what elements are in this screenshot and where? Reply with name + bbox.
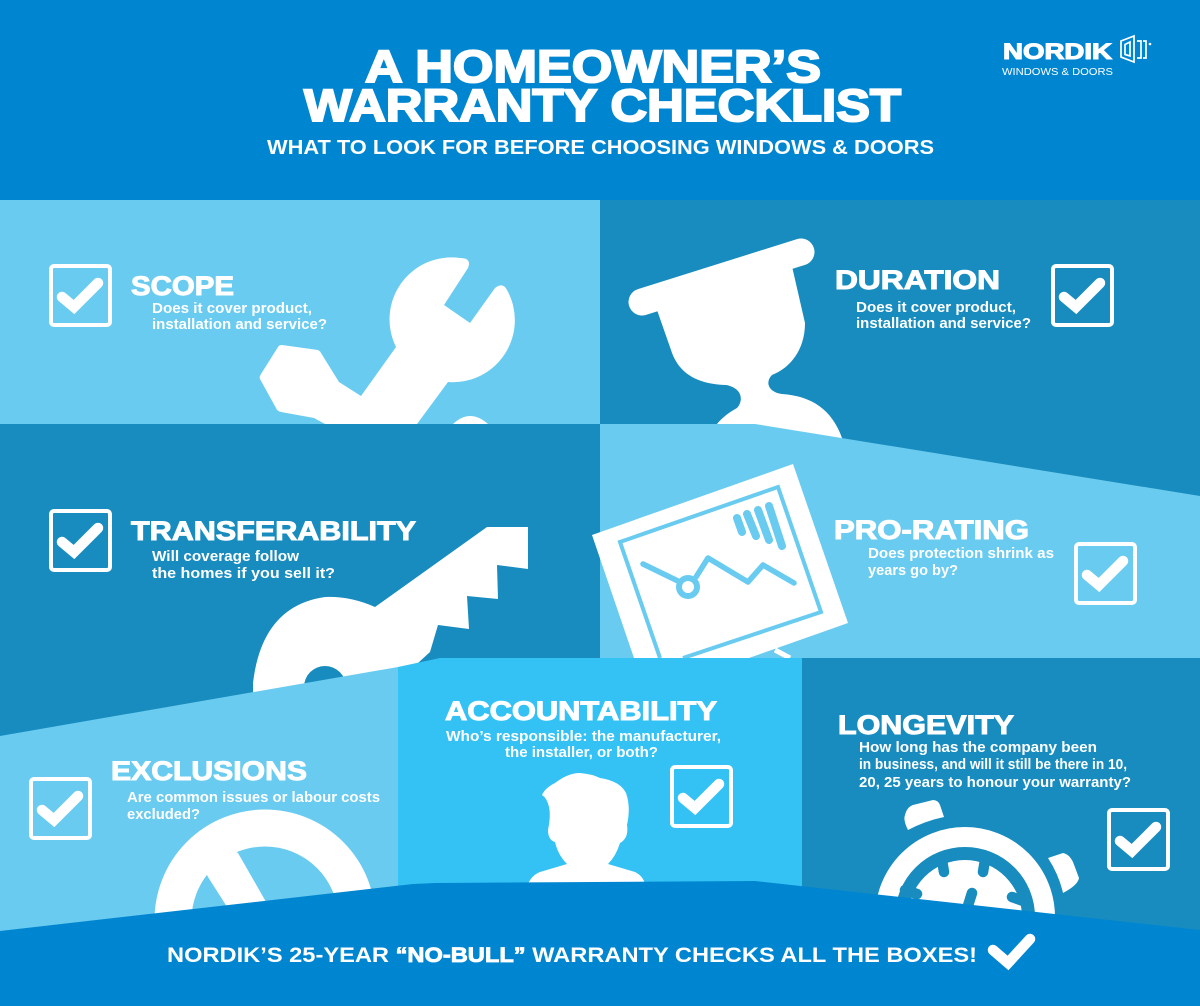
title: WARRANTY CHECKLIST — [304, 80, 901, 131]
checkbox: pro-rating — [1076, 544, 1135, 603]
title: A HOMEOWNER’S — [365, 41, 821, 92]
text: longevity question: How long has the company been — [859, 739, 1097, 756]
text: accountability question — [446, 728, 721, 761]
text: scope question — [152, 300, 327, 333]
text: transferability question: the homes if you sell it? — [152, 565, 335, 582]
checkbox: duration — [1053, 266, 1112, 325]
icon: prohibition sign — [173, 828, 357, 1006]
checkbox: accountability — [672, 767, 731, 826]
heading: scope: SCOPE — [131, 271, 234, 301]
panel: exclusions — [0, 667, 398, 1006]
panel: duration — [600, 200, 1200, 500]
subtitle: WHAT TO LOOK FOR BEFORE CHOOSING WINDOWS & DOORS — [267, 137, 934, 159]
text: longevity question: 20, 25 years to honour your warranty? — [859, 774, 1131, 791]
text: accountability question: the installer, or both? — [505, 744, 658, 761]
footer text: NORDIK’S 25-YEAR “NO-BULL” WARRANTY CHECKS ALL THE BOXES! — [167, 944, 977, 967]
text: pro-rating question: years go by? — [868, 562, 958, 579]
text: exclusions question — [127, 789, 380, 823]
heading: pro-rating: PRO-RATING — [834, 515, 1029, 545]
title — [304, 41, 901, 131]
checkbox: transferability — [51, 511, 110, 570]
text: scope question: Does it cover product, — [152, 300, 312, 317]
icon: chart screen — [592, 464, 848, 658]
icon: hourglass — [642, 252, 845, 450]
heading: transferability: TRANSFERABILITY — [131, 516, 416, 546]
text: longevity question: in business, and will it still be there in 10, — [859, 756, 1127, 773]
text: transferability question — [152, 548, 335, 582]
icon: stopwatch — [885, 800, 1079, 997]
text: exclusions question: excluded? — [127, 806, 200, 823]
panel: scope — [0, 200, 600, 424]
text: exclusions question: Are common issues or labour costs — [127, 789, 380, 806]
text: duration question — [856, 299, 1031, 332]
panel: longevity — [802, 658, 1200, 997]
text: accountability question: Who’s responsible: the manufacturer, — [446, 728, 721, 745]
icon: wrench — [260, 257, 515, 424]
checkbox: longevity — [1109, 810, 1168, 869]
text: longevity question — [859, 739, 1131, 791]
checkbox: exclusions — [31, 779, 90, 838]
logo — [1002, 36, 1151, 78]
icon: key — [253, 527, 528, 708]
text: scope question: installation and service? — [152, 316, 327, 333]
logo: NORDIK — [1003, 39, 1112, 64]
text: pro-rating question: Does protection shrink as — [868, 545, 1054, 562]
heading: duration: DURATION — [835, 265, 1000, 295]
text: pro-rating question — [868, 545, 1054, 579]
panel: accountability — [398, 658, 802, 890]
panel: transferability — [0, 424, 600, 736]
text: duration question: installation and service? — [856, 315, 1031, 332]
text: transferability question: Will coverage follow — [152, 548, 299, 565]
heading: longevity: LONGEVITY — [838, 710, 1014, 740]
logo: WINDOWS & DOORS — [1002, 66, 1113, 78]
icon: footer check mark — [993, 939, 1030, 963]
heading: accountability: ACCOUNTABILITY — [445, 696, 717, 726]
heading: exclusions: EXCLUSIONS — [111, 756, 307, 786]
panel: pro-rating — [592, 424, 1200, 658]
footer band — [0, 881, 1200, 1006]
text: duration question: Does it cover product, — [856, 299, 1016, 316]
checkbox: scope — [51, 266, 110, 325]
header band — [0, 0, 1200, 201]
icon: person — [528, 773, 645, 884]
